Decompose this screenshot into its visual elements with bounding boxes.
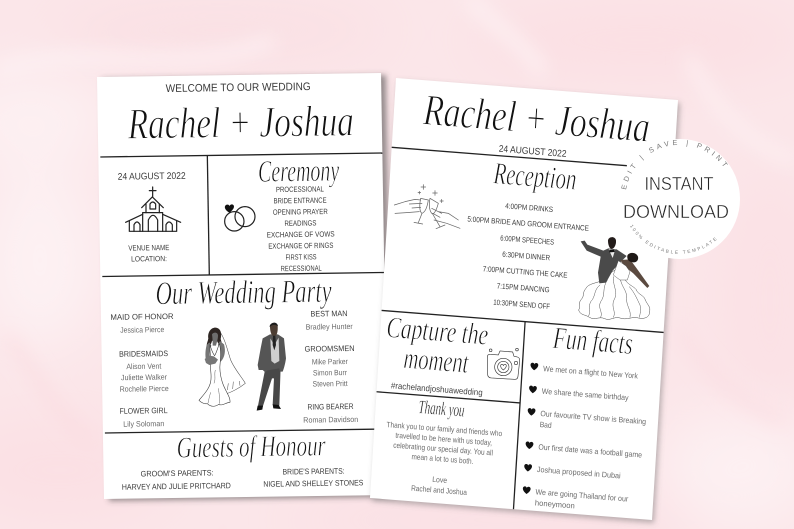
ceremony order list: EXCHANGE OF VOWS [267,229,335,239]
bridal party names: FLOWER GIRL [119,406,168,416]
groom party names: Steven Pritt [313,379,348,389]
ceremony order list: FIRST KISS [285,252,317,262]
heading: capture the moment: moment [403,342,470,380]
fact 6: We are going Thailand for our [535,487,629,504]
bridal party names: Rochelle Pierce [120,384,169,394]
bridal party names: Jessica Pierce [120,325,164,335]
hair [207,328,222,348]
reception schedule: 7:15PM DANCING [496,281,550,294]
thank you message: Thank you to our family and friends who [386,420,502,438]
bouquet [205,356,218,365]
thank you message: Rachel and Joshua [411,484,468,497]
fact 4: Our first date was a football game [538,442,642,460]
venue details [128,243,170,264]
panel: right program card [370,78,680,523]
hair [270,323,278,327]
fact 5: Joshua proposed in Dubai [537,465,621,480]
heading: guests of honour: Guests of Honour [176,429,326,464]
groom party names: Mike Parker [312,357,348,367]
bridal party names: BRIDESMAIDS [119,349,168,359]
jacket [258,334,286,372]
illustration: bride [199,328,245,406]
badge: instant download [621,139,740,259]
groom party names: Bradley Hunter [306,322,353,332]
reception schedule: 4:00PM DRINKS [505,201,553,214]
guests of honour names: GROOM'S PARENTS: [141,468,214,478]
heading: couple names: Rachel + Joshua [127,96,354,149]
groom party names: BEST MAN [310,309,348,319]
groom party names [301,309,358,425]
guests of honour names: BRIDE'S PARENTS: [283,467,345,476]
fact 3: Our favourite TV show is Breaking [540,409,646,426]
icon: church [126,187,181,231]
fact 6 [522,486,629,515]
veil folds [227,381,240,390]
icon: champagne toast [394,185,460,229]
heading: thank you: Thank you [418,397,465,422]
hashtag: #rachelandjoshuawedding [391,380,483,398]
trousers [258,367,281,407]
bridal party names: Lily Soloman [123,419,164,429]
groom head [608,237,616,249]
reception schedule: 6:00PM SPEECHES [500,234,554,247]
thank you message: travelled to be here with us today, [395,431,492,447]
heading: wedding party: Our Wedding Party [155,274,332,312]
illustration: groom [257,323,286,411]
bridal party names: Alison Vent [126,362,162,371]
groom party names: RING BEARER [307,402,354,412]
groom shirt and bow tie [609,249,615,258]
venue details: VENUE NAME [128,243,169,253]
heading: reception: Reception [492,155,578,197]
tie [273,336,276,350]
groom party names: GROOMSMEN [304,344,355,354]
reception schedule: 10:30PM SEND OFF [493,298,551,311]
left card contents [97,73,388,499]
ceremony order list: RECESSIONAL [281,264,322,273]
fact 2: We share the same birthday [542,387,629,402]
arms [205,341,225,364]
ceremony order list: EXCHANGE OF RINGS [268,241,333,251]
thank you message: celebrating our special day. You all [393,441,493,457]
heading: ceremony: Ceremony [258,153,340,189]
bride arm and shoulder [620,259,649,288]
groom party names: Simon Burr [313,368,347,378]
heading: capture the moment: Capture the [386,311,489,352]
bride bodice [613,261,630,280]
ceremony order list: BRIDE ENTRANCE [274,196,327,205]
heading: capture the moment [384,311,489,381]
fun facts list [522,363,649,516]
bridal party names [110,312,176,429]
bridal party names: MAID OF HONOR [110,312,174,322]
neck and face [212,333,218,346]
reception schedule: 6:30PM DINNER [502,250,551,262]
ceremony order list: OPENING PRAYER [273,207,328,217]
dress [199,344,230,406]
illustration: dancing couple [579,237,650,319]
ceremony order list: READINGS [284,218,317,228]
thank you message: Love [432,475,447,485]
fact 6: honeymoon [535,498,575,510]
bride hair [627,253,638,262]
thank you message: mean a lot to us both. [411,452,474,466]
panel: left program card [97,73,393,501]
guests of honour names: NIGEL AND SHELLEY STONES [263,478,363,489]
thank you message [382,420,502,499]
ceremony order list [266,184,335,273]
fact 1: We met on a flight to New York [543,364,638,381]
curved text: editable template: 100% EDITABLE TEMPLATE [630,224,717,254]
bridal party names: Juliette Walker [121,373,167,382]
right card contents [370,78,678,520]
ceremony order list: PROCESSIONAL [276,184,324,194]
reception schedule [462,198,590,314]
groom party names: Roman Davidson [303,415,358,425]
heading: welcome: WELCOME TO OUR WEDDING [166,81,311,95]
date: 24 AUGUST 2022 [118,171,186,183]
venue details: LOCATION: [131,254,167,264]
head [270,323,278,336]
groom jacket and arms [581,241,627,283]
icon: camera [487,348,520,379]
reception schedule: 5:00PM BRIDE AND GROOM ENTRANCE [467,214,589,233]
veil [219,331,245,394]
card shadow [372,81,680,523]
shoes [257,404,281,411]
guests of honour names: HARVEY AND JULIE PRITCHARD [122,481,231,492]
gown [579,267,650,319]
icon: wedding rings [225,204,255,231]
fact 3: Bad [539,420,552,430]
instant: INSTANT [644,173,714,194]
waistcoat [270,338,279,364]
heading: fun facts: Fun facts [551,320,634,361]
dress folds [208,370,220,404]
download: DOWNLOAD [623,201,729,222]
fact 3 [527,408,646,437]
date: 24 AUGUST 2022 [498,144,567,160]
heading: couple names: Rachel + Joshua [421,85,651,152]
card shadow [102,75,393,501]
guests of honour names [122,466,363,492]
reception schedule: 7:00PM CUTTING THE CAKE [483,264,568,280]
curved text: edit save print: EDIT | SAVE | PRINT [621,140,728,190]
gown ruffles [589,277,641,317]
